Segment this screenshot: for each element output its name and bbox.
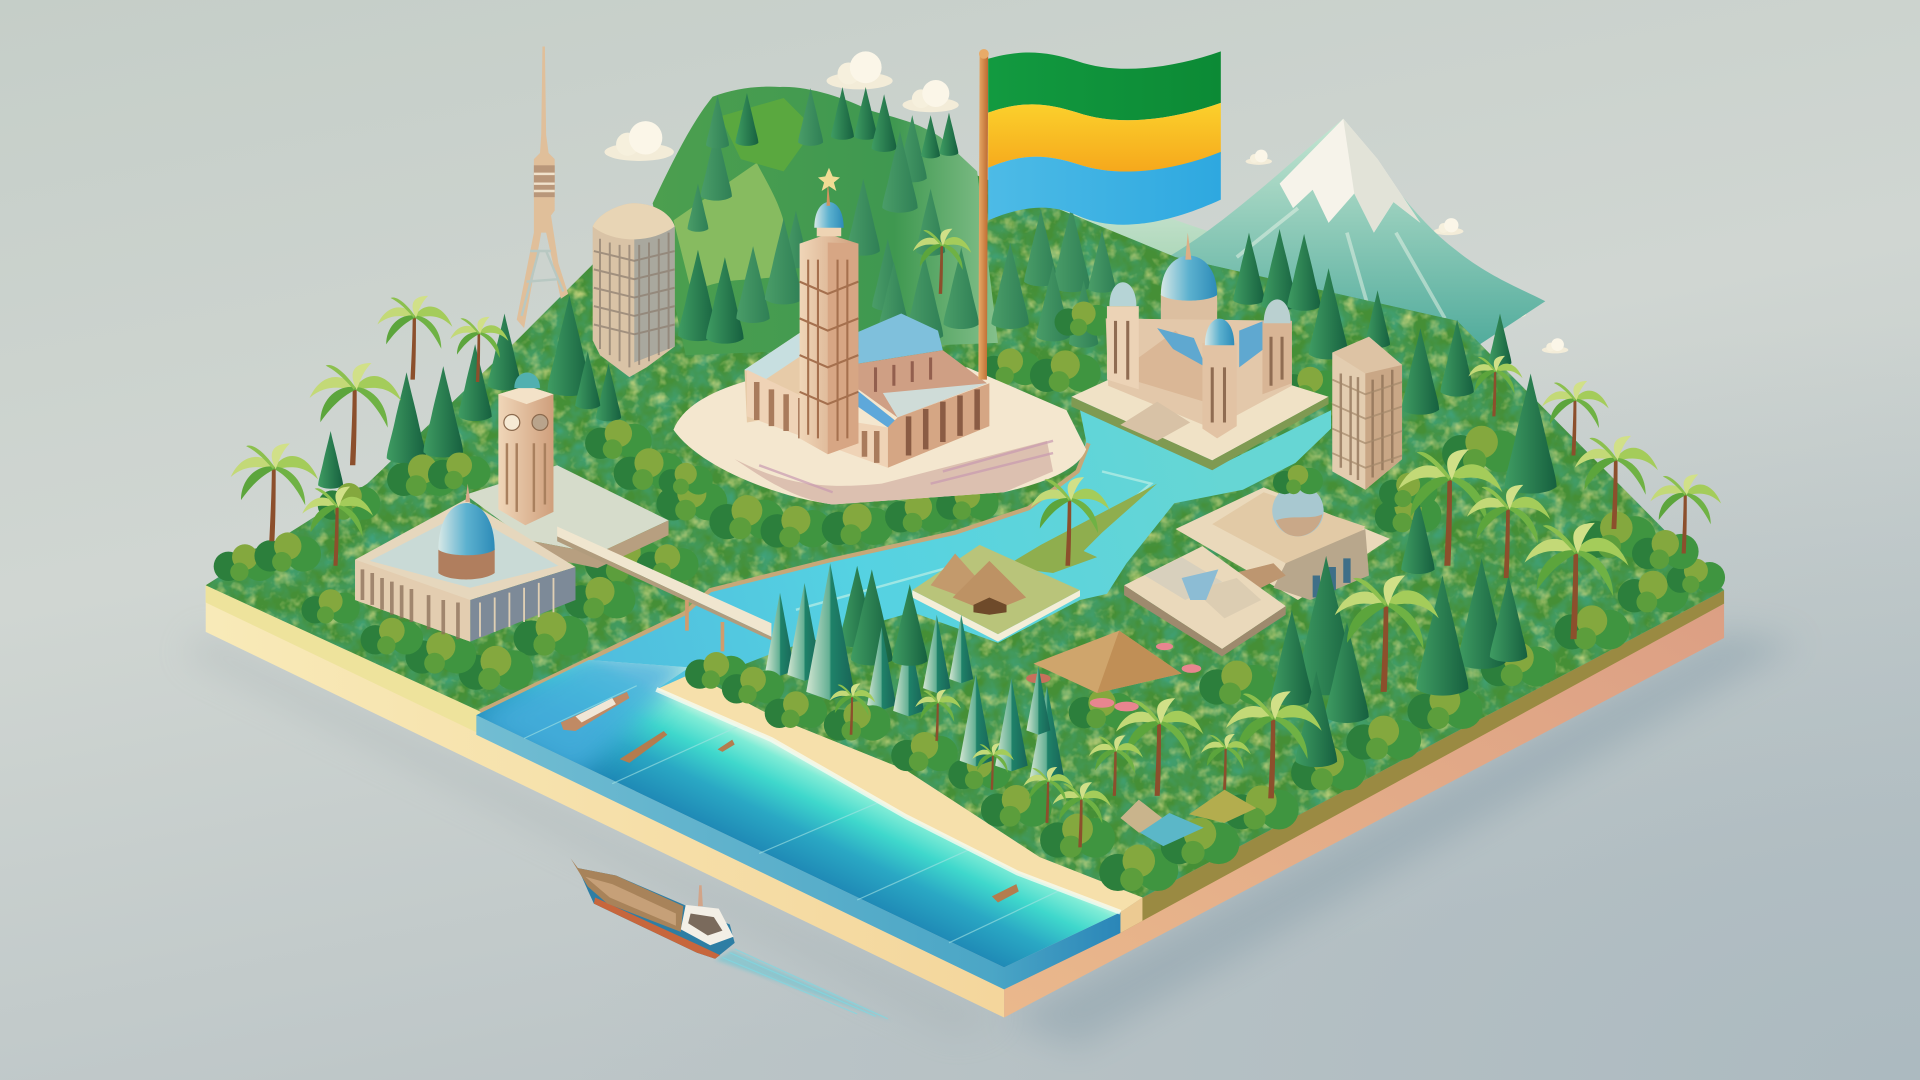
surf bbox=[656, 689, 1120, 912]
cargo ship bbox=[571, 858, 735, 959]
right forest conifers bbox=[1271, 373, 1557, 767]
right palace bbox=[1071, 233, 1329, 470]
palm trees bbox=[231, 229, 1721, 847]
green land bbox=[196, 159, 1739, 931]
sea bbox=[465, 649, 1120, 967]
right domed complex bbox=[1124, 485, 1390, 656]
east front bbox=[888, 383, 989, 468]
left domed government building bbox=[355, 484, 576, 642]
left tower bbox=[1107, 306, 1139, 389]
clock tower terrace bbox=[465, 465, 669, 553]
radio spire tower bbox=[517, 47, 568, 328]
bell tower bbox=[800, 234, 858, 454]
far right tower bbox=[1262, 321, 1292, 394]
platform shadow bbox=[184, 631, 1800, 1047]
round tower block bbox=[593, 203, 675, 377]
back roof bbox=[858, 313, 943, 364]
river highlights bbox=[576, 471, 1151, 710]
terrace outer wall bbox=[527, 520, 669, 568]
left forest bbox=[214, 295, 999, 690]
river palm bbox=[1031, 477, 1110, 566]
central cathedral bbox=[673, 168, 1086, 504]
bridge bbox=[557, 527, 771, 651]
platform side: left cream bbox=[206, 585, 1004, 1018]
flag pole bbox=[978, 49, 989, 380]
flat roof wing bbox=[744, 333, 858, 422]
palace terrace bbox=[1071, 349, 1329, 460]
palace body bbox=[1106, 318, 1292, 429]
beach bbox=[656, 673, 1142, 912]
sea grid lines bbox=[524, 686, 1065, 943]
forested hill bbox=[653, 87, 998, 355]
misty hills behind flag bbox=[967, 181, 1298, 367]
clouds bbox=[604, 51, 1568, 353]
small boats bbox=[561, 692, 1019, 902]
middle tower bbox=[1202, 343, 1237, 438]
beach tents bbox=[1120, 790, 1256, 846]
front teal conifers bbox=[960, 666, 1064, 784]
huts on clearing bbox=[912, 545, 1080, 642]
west front bbox=[747, 370, 888, 468]
blue strip bbox=[844, 380, 898, 427]
snow-capped mountain bbox=[1157, 119, 1545, 367]
flag of Gabon bbox=[988, 51, 1221, 225]
grassy slope bbox=[673, 163, 787, 294]
front light conifers bbox=[765, 563, 973, 716]
river islet bbox=[1004, 484, 1157, 573]
thatched pavilion bbox=[1026, 631, 1201, 711]
sea side face bbox=[476, 715, 1120, 989]
ship wake bbox=[715, 949, 893, 1021]
cathedral plaza bbox=[673, 367, 1086, 504]
clock tower bbox=[498, 373, 553, 525]
mid-bank foliage bbox=[685, 426, 1725, 891]
right tower block bbox=[1332, 337, 1402, 490]
central dome bbox=[1161, 294, 1217, 343]
river bbox=[480, 398, 1331, 711]
river bank bbox=[480, 443, 1089, 711]
platform side: right terracotta bbox=[1004, 590, 1724, 1018]
forest behind the flag bbox=[979, 206, 1511, 415]
